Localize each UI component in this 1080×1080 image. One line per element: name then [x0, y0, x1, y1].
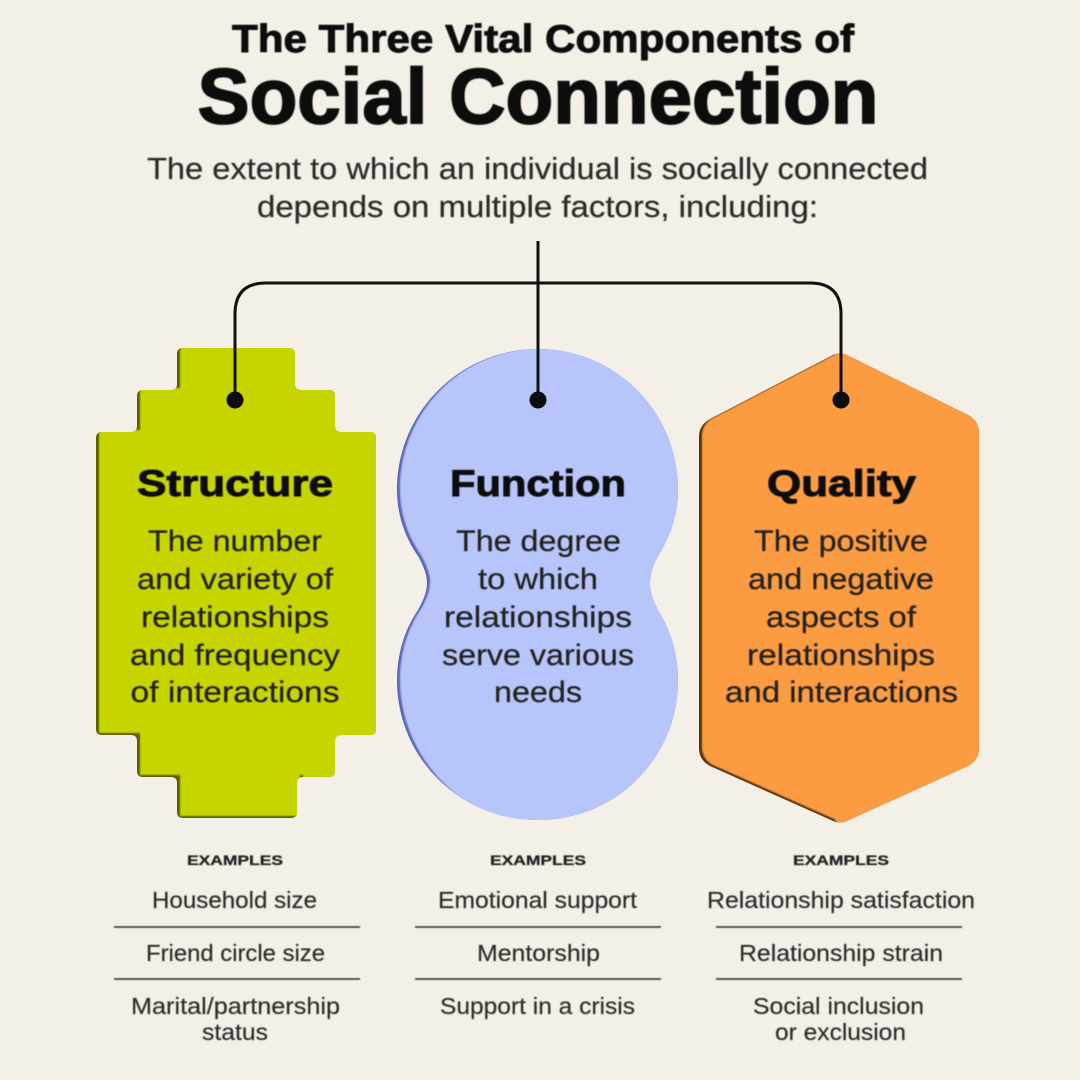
- description: function: [442, 525, 634, 709]
- description: structure: and frequency: [130, 639, 340, 672]
- description: quality: [725, 525, 958, 709]
- description: function: needs: [494, 676, 582, 709]
- description: structure: [130, 525, 340, 709]
- heading: function: Function: [450, 463, 626, 504]
- examples: structure: Marital/partnership: [131, 993, 340, 1019]
- subtitle: depends on multiple factors, including:: [257, 189, 818, 224]
- examples: quality: Relationship satisfaction: [707, 887, 975, 913]
- examples: function: [415, 852, 661, 1019]
- examples: structure: status: [202, 1019, 268, 1045]
- examples: structure: [114, 852, 360, 1045]
- description: structure: of interactions: [130, 676, 340, 709]
- description: structure: The number: [148, 525, 322, 558]
- examples: function: Support in a crisis: [440, 993, 635, 1019]
- examples: quality: [707, 852, 975, 1045]
- description: function: to which: [478, 563, 598, 596]
- header: [147, 18, 928, 224]
- description: quality: and interactions: [725, 676, 958, 709]
- examples: quality: or exclusion: [775, 1019, 906, 1045]
- title line 1: The Three Vital Components of: [232, 18, 855, 61]
- examples: quality: EXAMPLES: [793, 852, 889, 868]
- description: structure: and variety of: [137, 563, 334, 596]
- shape: stepped green block: [96, 348, 376, 818]
- description: quality: and negative: [748, 563, 934, 596]
- description: quality: relationships: [747, 639, 935, 672]
- examples: structure: Household size: [152, 887, 317, 913]
- examples: structure: Friend circle size: [146, 940, 325, 966]
- panel: structure: [96, 348, 376, 818]
- description: function: relationships: [444, 601, 632, 634]
- panel: quality: [699, 349, 993, 829]
- heading: structure: Structure: [137, 463, 333, 504]
- connector: tree linking the three components: [226, 241, 850, 408]
- description: function: serve various: [442, 639, 634, 672]
- description: structure: relationships: [141, 601, 329, 634]
- shape: blue peanut blob: [397, 348, 693, 824]
- shape: orange hexagon: [699, 349, 993, 829]
- examples: structure: EXAMPLES: [187, 852, 283, 868]
- examples: function: Mentorship: [477, 940, 600, 966]
- examples: function: Emotional support: [438, 887, 638, 913]
- heading: quality: Quality: [767, 463, 916, 504]
- examples: quality: Social inclusion: [753, 993, 924, 1019]
- panel: function: [397, 348, 693, 824]
- subtitle: The extent to which an individual is socially connected: [147, 151, 928, 186]
- examples: function: EXAMPLES: [490, 852, 586, 868]
- examples: quality: Relationship strain: [739, 940, 943, 966]
- subtitle: [147, 151, 928, 224]
- description: quality: aspects of: [766, 601, 917, 634]
- description: function: The degree: [456, 525, 621, 558]
- title line 2: Social Connection: [198, 52, 878, 140]
- description: quality: The positive: [754, 525, 928, 558]
